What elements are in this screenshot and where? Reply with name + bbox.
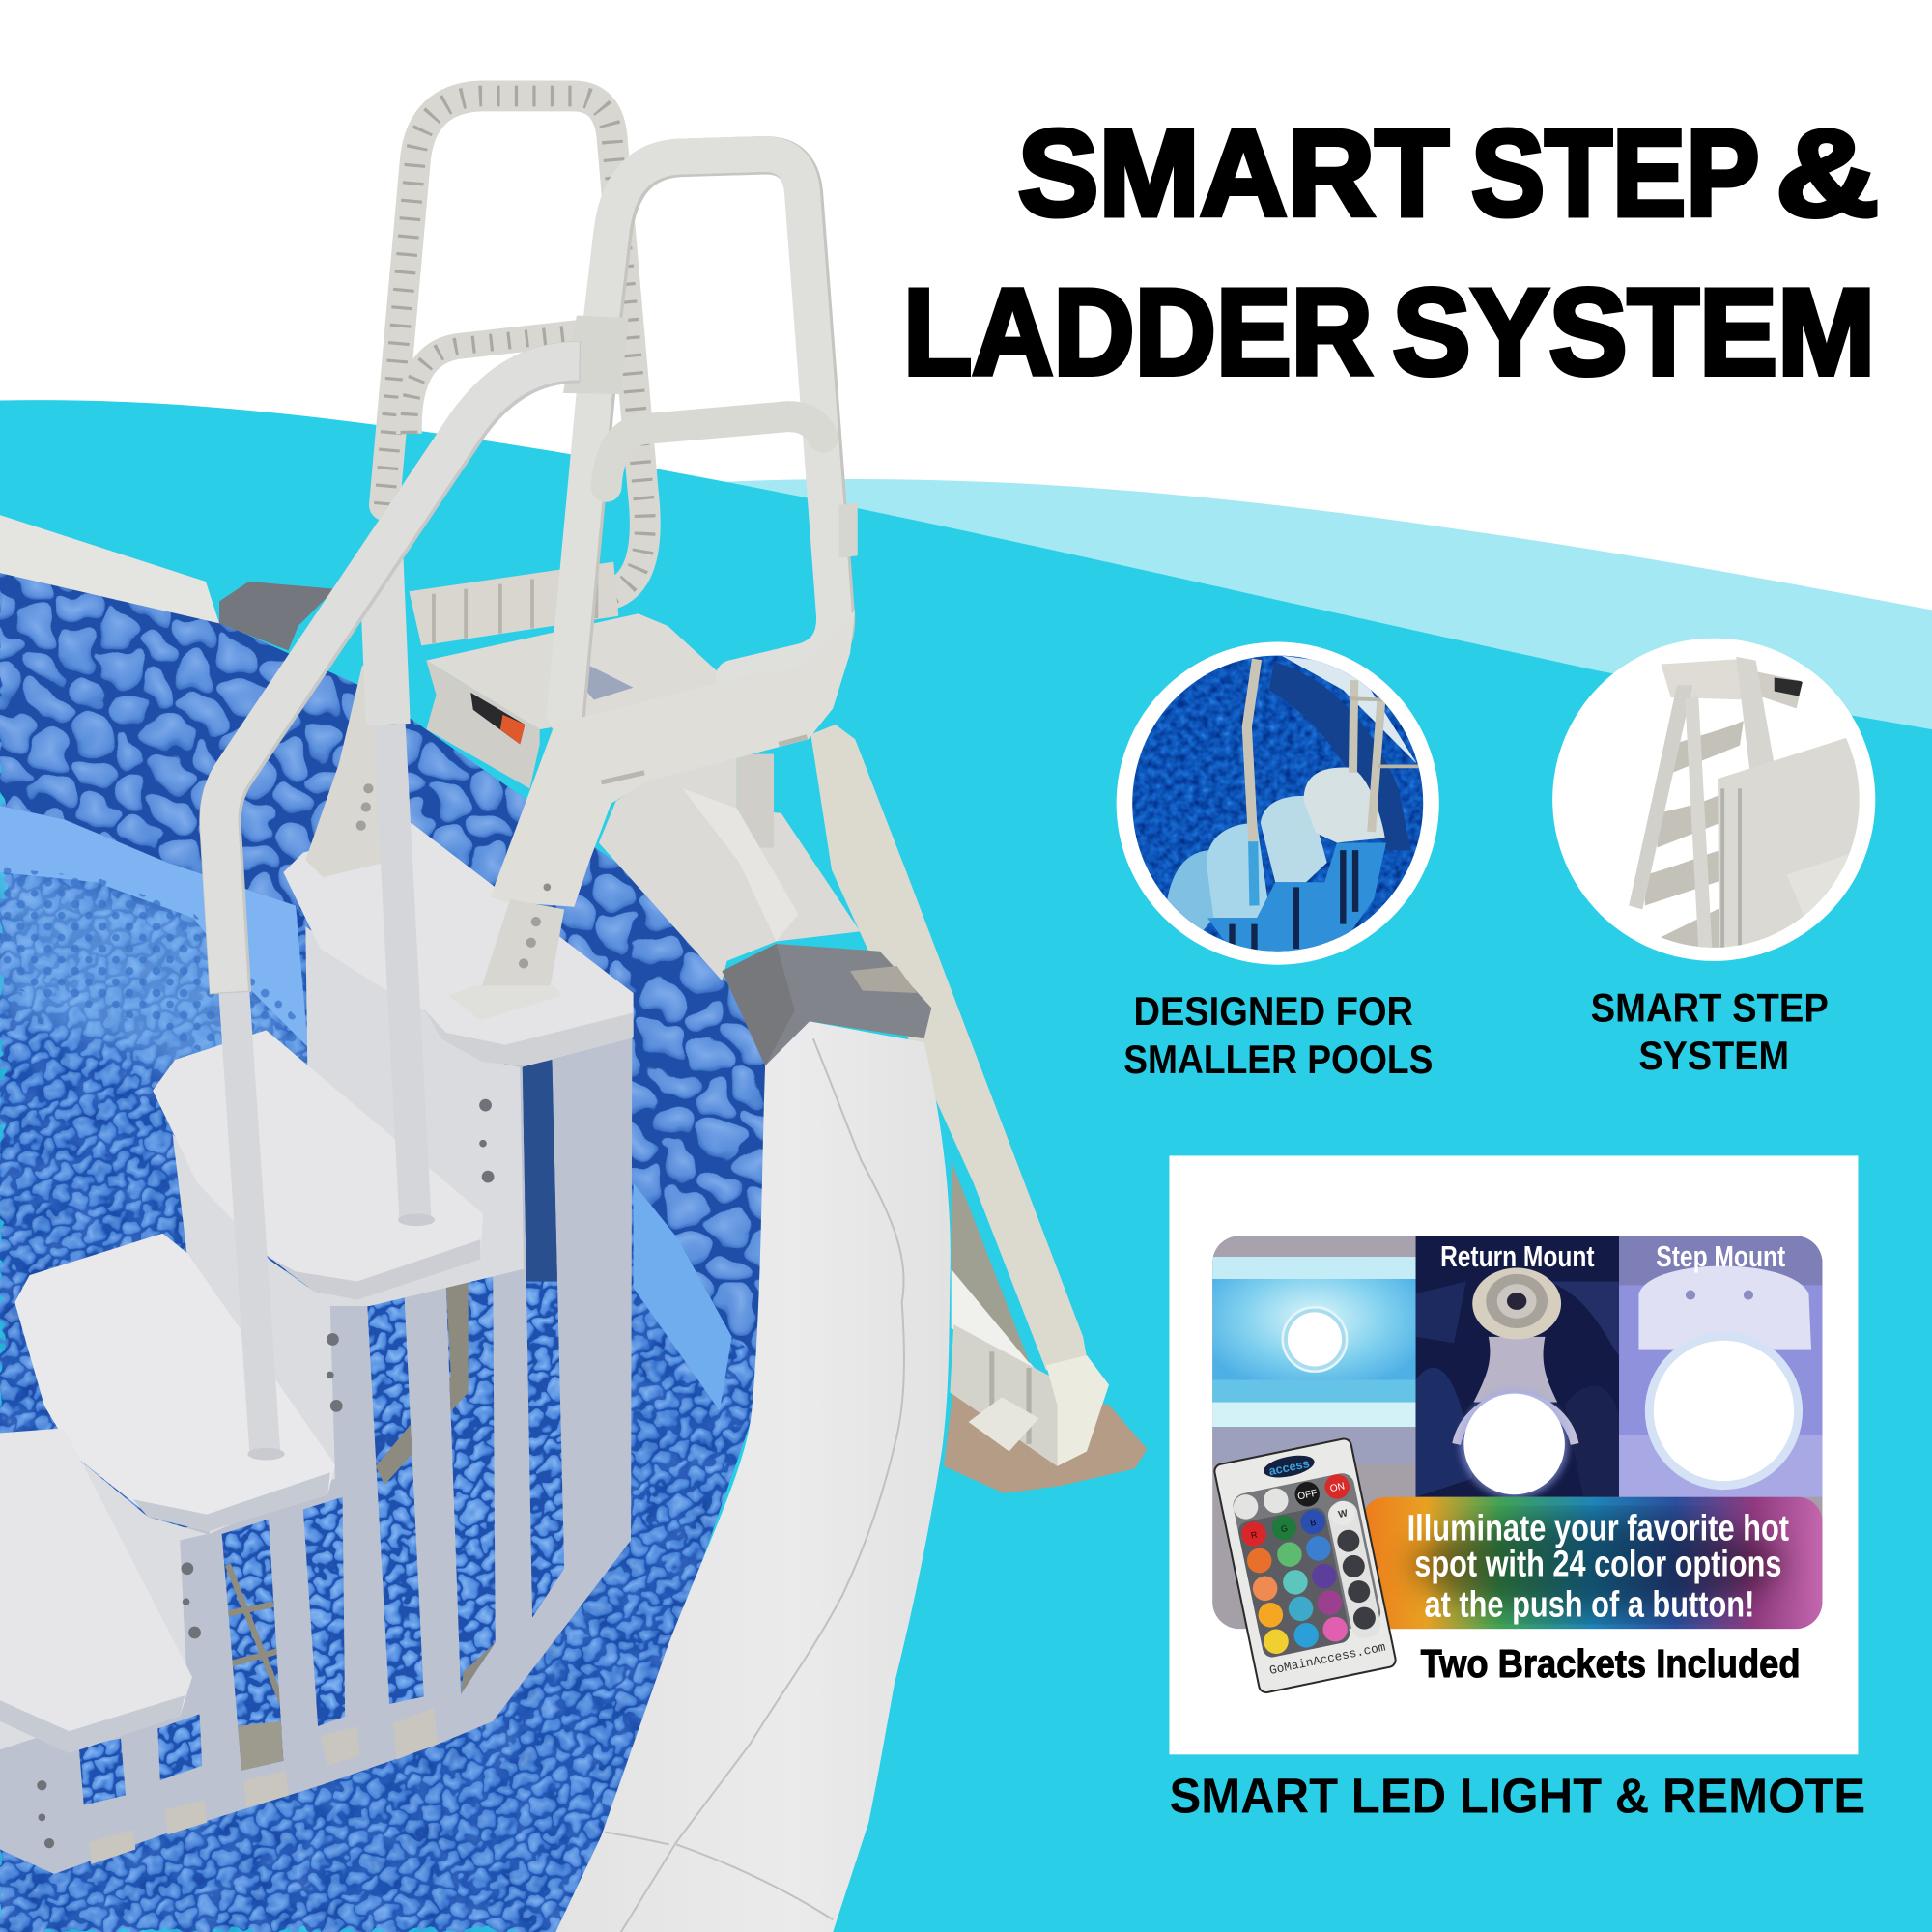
handrail lower	[234, 992, 265, 1452]
ladder rungs	[1645, 721, 1744, 949]
platform deck	[426, 613, 727, 729]
label: smart step system: SMART STEP	[1591, 984, 1829, 1030]
label: smart step system	[1591, 984, 1829, 1078]
photo: step mount	[1619, 1236, 1822, 1497]
warning sticker	[470, 693, 525, 744]
top step body	[305, 926, 524, 1306]
step 3 body	[0, 1455, 207, 1749]
top platform	[1661, 659, 1749, 699]
title line 2: LADDER	[903, 265, 1373, 402]
lowest step	[1167, 850, 1213, 930]
light blue band right	[634, 1182, 732, 1410]
bracket	[1474, 1337, 1557, 1403]
top step	[283, 823, 634, 1065]
back ladder frame	[384, 96, 645, 594]
label: designed for smaller pools: DESIGNED FOR	[1133, 988, 1413, 1034]
paver stone	[944, 1385, 1148, 1493]
stair frame	[0, 1018, 632, 1874]
photo: return mount	[1416, 1236, 1619, 1498]
remote control	[1213, 1437, 1397, 1693]
title line 1: SMART	[1018, 105, 1449, 242]
circle: smart step system	[1552, 639, 1875, 961]
step body	[1718, 738, 1861, 949]
colour buttons	[1239, 1507, 1350, 1656]
ladder platform	[305, 562, 727, 877]
rainbow bar	[1361, 1497, 1822, 1629]
rail collar	[563, 316, 629, 394]
caption: two brackets included: Two Brackets Included	[1421, 1641, 1801, 1686]
mode buttons: W	[1337, 1508, 1349, 1520]
rainbow bar text: Illuminate your favorite hot	[1407, 1507, 1789, 1548]
braces behind slots	[376, 1280, 496, 1694]
rail feet	[247, 1213, 435, 1460]
arm	[810, 724, 1087, 1370]
label: smart LED light and remote: SMART LED LIGHT & REMOTE	[1169, 1768, 1865, 1823]
step 3	[14, 1234, 335, 1531]
step 2 body	[173, 1133, 359, 1534]
bubbles on band	[4, 867, 296, 1051]
photo captions: Return Mount	[1440, 1240, 1595, 1273]
photo captions: Step Mount	[1656, 1240, 1785, 1273]
remote URL: GoMainAccess.com	[1268, 1639, 1387, 1678]
title	[903, 105, 1879, 402]
left leg	[305, 666, 384, 877]
step 2	[1261, 796, 1327, 882]
white base	[952, 1269, 1042, 1378]
posts	[1247, 659, 1257, 841]
post 2 lower	[389, 724, 415, 1217]
submerged frame	[1208, 842, 1386, 952]
title line 1: &	[1776, 105, 1879, 242]
LED photo strip	[1212, 1236, 1822, 1629]
pool wall band	[1269, 662, 1410, 850]
floor pebbles	[0, 567, 788, 1932]
colour buttons: G	[1280, 1523, 1289, 1534]
step 4	[0, 1428, 192, 1750]
right curved rail and post	[599, 754, 860, 980]
colour buttons: B	[1309, 1518, 1317, 1528]
label: designed for smaller pools	[1123, 988, 1433, 1082]
grey connector left	[219, 582, 335, 650]
grey connector right	[722, 944, 931, 1065]
big pebble wall	[0, 573, 769, 1354]
arm foot	[1046, 1355, 1109, 1466]
cyan wave	[0, 400, 1932, 1932]
photo captions	[1440, 1240, 1785, 1273]
handrail upper	[220, 362, 581, 993]
white pool rim	[555, 1021, 951, 1932]
title line 1	[1018, 105, 1879, 242]
top step	[1303, 768, 1385, 842]
rainbow bar text: at the push of a button!	[1424, 1583, 1754, 1625]
top row buttons: OFF	[1296, 1489, 1319, 1502]
main photo: pool step and ladder	[0, 96, 1148, 1932]
front ladder rail	[564, 154, 836, 716]
label decal	[577, 661, 634, 699]
title line 1: STEP	[1471, 105, 1759, 242]
rainbow bar text: spot with 24 color options	[1414, 1543, 1781, 1584]
ribbed back plate	[409, 562, 618, 645]
panel: LED light and remote	[1169, 1155, 1858, 1754]
see-through slots	[79, 1060, 564, 1804]
post 2 sleeve	[381, 549, 388, 724]
photo: lit pool wall	[1212, 1236, 1416, 1463]
label: smart step system: SYSTEM	[1638, 1033, 1789, 1078]
diagonal support arm	[810, 724, 1148, 1493]
low windows	[89, 1708, 438, 1864]
colour buttons: R	[1250, 1529, 1259, 1540]
mode buttons	[1325, 1498, 1383, 1640]
light cyan wave	[724, 479, 1932, 739]
front leg yoke	[448, 610, 855, 1020]
remote control: access	[1267, 1456, 1311, 1478]
step 3	[1207, 823, 1270, 918]
stair unit	[0, 823, 634, 1874]
ladder stiles	[1629, 685, 1693, 909]
circle: designed for smaller pools	[1117, 642, 1439, 965]
rim seam line	[605, 1038, 904, 1932]
light fade on floor	[0, 872, 307, 1082]
frame holes	[37, 1099, 494, 1848]
light blue floor band	[0, 806, 308, 1047]
title line 2	[903, 265, 1875, 402]
rim sliver	[1282, 656, 1417, 764]
left top rail	[0, 515, 219, 623]
platform underside	[426, 661, 540, 788]
step 2	[153, 1030, 483, 1300]
top row buttons	[1231, 1472, 1352, 1521]
left handrail tubes	[219, 361, 581, 1452]
rainbow bar text	[1407, 1507, 1789, 1625]
label: designed for smaller pools: SMALLER POOLS	[1123, 1037, 1433, 1082]
pool liner	[0, 567, 788, 1932]
button well	[1231, 1471, 1382, 1647]
remote logo	[1262, 1452, 1317, 1481]
top row buttons: ON	[1329, 1481, 1346, 1494]
rail side tab	[839, 502, 858, 558]
title line 2: SYSTEM	[1392, 265, 1875, 402]
